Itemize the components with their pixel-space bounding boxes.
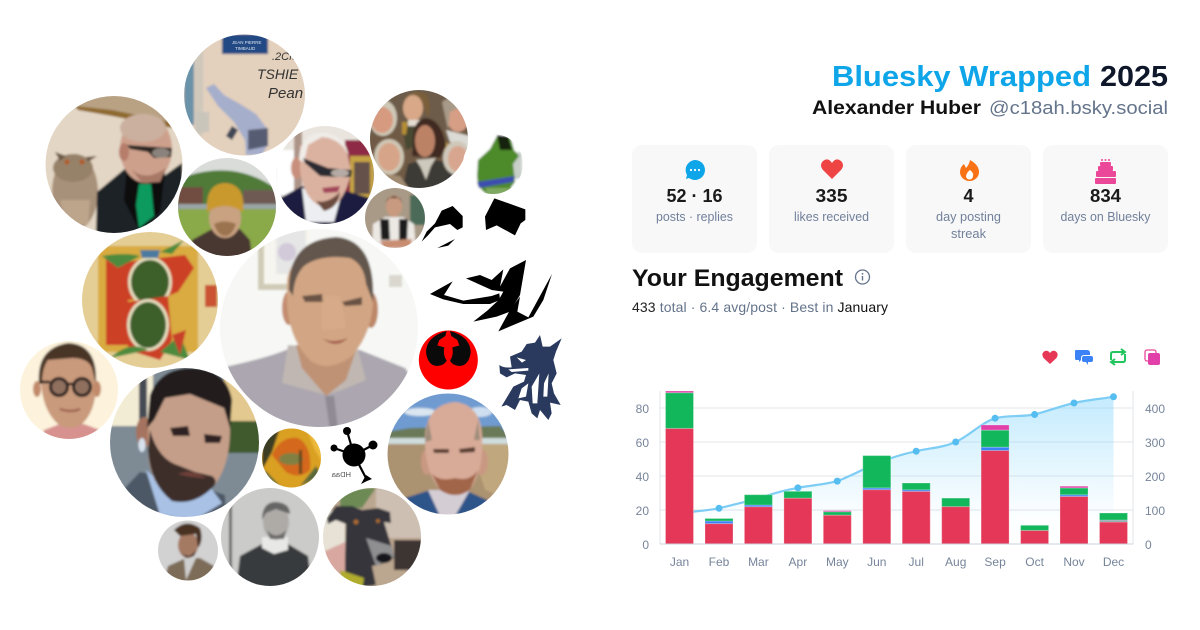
panel: days on Bluesky: 834: [1090, 186, 1121, 206]
cumulative line: [680, 397, 1114, 513]
left axis labels: 60: [636, 436, 649, 450]
avatar: bald man on beach: [386, 392, 512, 516]
cumulative area: [680, 397, 1114, 544]
user name and handle: @c18ah.bsky.social: [989, 97, 1168, 118]
panel: day posting streak: streak: [951, 227, 987, 241]
icon: info: [856, 270, 870, 284]
month labels: Oct: [1025, 555, 1045, 569]
icon: heart: [821, 159, 843, 179]
left axis labels: 20: [636, 504, 649, 518]
panel: likes received: 335: [816, 186, 848, 206]
panel: posts and replies: 52 · 16: [666, 186, 722, 206]
user name and handle: [812, 97, 1168, 119]
right axis labels: 400: [1145, 402, 1165, 416]
month labels: Jan: [670, 555, 689, 569]
month labels: Jun: [867, 555, 886, 569]
panel: day posting streak: [906, 145, 1031, 253]
cumulative points: [716, 393, 1117, 512]
avatar: man with round glasses: [20, 341, 118, 439]
left axis labels: 40: [636, 470, 649, 484]
avatar: griffin emblem: [499, 335, 562, 420]
right axis labels: [1145, 402, 1165, 552]
right axis labels: 0: [1145, 538, 1152, 552]
avatar: frog: [463, 134, 523, 194]
avatar: man in vest: [365, 188, 425, 248]
month labels: Nov: [1063, 555, 1085, 569]
icon: flame: [960, 160, 979, 181]
left axis labels: 80: [636, 402, 649, 416]
avatar: man with wavy hair in tan suit: [158, 520, 218, 580]
avatar: illuminated letter: [80, 230, 220, 370]
avatar: man with glasses in suit: [274, 124, 376, 226]
panel: day posting streak: day posting: [936, 210, 1001, 224]
avatar: man with dark hair and beard: [108, 366, 264, 520]
icon: replies: [1075, 350, 1093, 365]
panel: likes received: [769, 145, 894, 253]
avatar: molecule logo: [330, 427, 378, 484]
right axis labels: 200: [1145, 470, 1165, 484]
avatar: group painting: [368, 88, 471, 190]
gridlines: [660, 408, 1133, 510]
month labels: May: [826, 555, 849, 569]
heading: your engagement: Your Engagement: [632, 265, 843, 292]
avatar: man with owl: [44, 94, 186, 236]
month labels: Sep: [984, 555, 1006, 569]
panel: likes received: likes received: [794, 210, 869, 224]
left axis labels: 0: [642, 538, 649, 552]
icon: reposts: [1111, 349, 1125, 365]
right axis labels: 300: [1145, 436, 1165, 450]
month labels: [670, 555, 1124, 569]
icon: quotes: [1145, 350, 1160, 365]
avatar: greyhound: [321, 486, 423, 590]
avatar: molecule logo: HDaa: [331, 470, 351, 479]
x axis baseline: [660, 543, 1133, 545]
chart legend: [1042, 349, 1160, 365]
chart: engagement per month: [636, 391, 1165, 569]
panel: posts and replies: posts · replies: [656, 210, 733, 224]
title: 2025: [1100, 61, 1168, 93]
avatar: masked face mouth: [430, 260, 552, 331]
avatar: man with yellow beanie: [176, 156, 278, 258]
avatar: street art: JEAN PIERRE: [232, 40, 262, 45]
panel: days on Bluesky: [1043, 145, 1168, 253]
icon: cake: [1095, 159, 1116, 184]
avatar: orange painting: [262, 428, 321, 488]
panel: day posting streak: 4: [963, 186, 974, 206]
avatar cloud: [18, 30, 562, 590]
panel: days on Bluesky: days on Bluesky: [1060, 210, 1151, 224]
icon: chat bubble: [686, 160, 705, 180]
month labels: Jul: [909, 555, 924, 569]
avatar: masked face eyes: [422, 198, 525, 248]
avatar: street art: [184, 34, 305, 156]
engagement summary: 433 total · 6.4 avg/post · Best in January: [632, 299, 888, 315]
user name and handle: Alexander Huber: [812, 97, 981, 119]
month labels: Feb: [709, 555, 730, 569]
icon: likes: [1042, 351, 1058, 364]
month labels: Dec: [1103, 555, 1124, 569]
bars: [666, 391, 1128, 544]
right axis labels: 100: [1145, 504, 1165, 518]
panel: posts and replies: [632, 145, 757, 253]
avatar: rebel alliance logo: [419, 330, 478, 389]
month labels: Aug: [945, 555, 966, 569]
left axis labels: [636, 402, 649, 552]
avatar: main portrait: [218, 227, 422, 432]
month labels: Mar: [748, 555, 769, 569]
month labels: Apr: [789, 555, 807, 569]
avatar: street art: Pean: [268, 85, 303, 102]
avatar: street art: TIMBAUD: [235, 46, 256, 51]
avatar: street art: TSHIE: [257, 66, 299, 82]
avatar: black and white portrait: [219, 486, 321, 588]
title: Bluesky Wrapped: [832, 61, 1091, 93]
avatar: street art: .2CM: [272, 51, 299, 63]
